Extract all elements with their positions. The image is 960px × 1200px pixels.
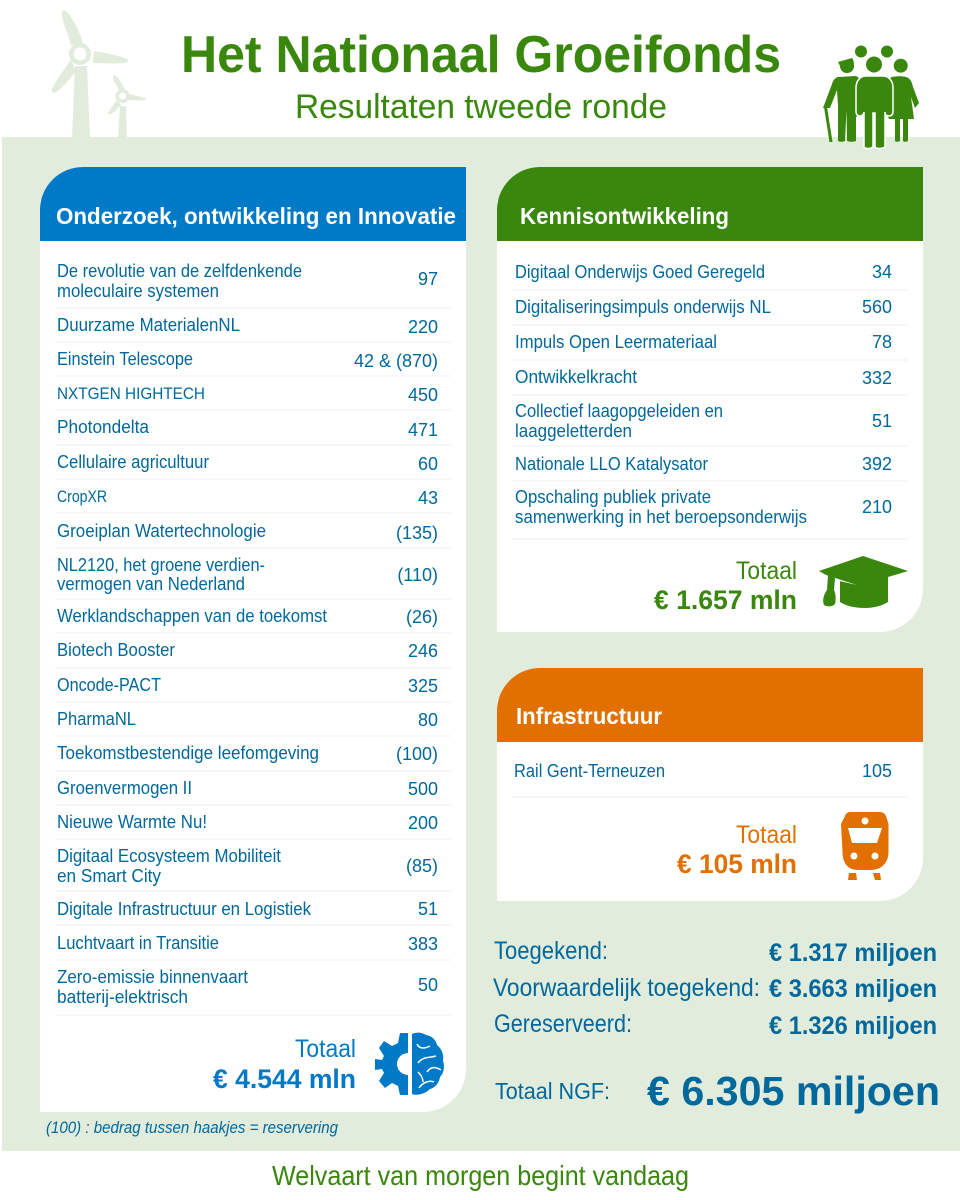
project rows: 43 — [418, 488, 438, 508]
project rows: Toekomstbestendige leefomgeving — [57, 743, 319, 763]
panel heading: Kennisontwikkeling — [520, 203, 729, 229]
panel header — [40, 167, 466, 241]
panel: Infrastructuur — [497, 668, 923, 901]
icon: group of people — [823, 46, 919, 148]
project rows: 392 — [862, 454, 892, 474]
panel: Onderzoek, ontwikkeling en Innovatie — [40, 167, 466, 1112]
summary: toegekend: € 1.317 miljoen — [769, 939, 937, 967]
project rows: vermogen van Nederland — [57, 574, 245, 594]
panel total: € 4.544 mln — [213, 1064, 356, 1094]
project rows: Collectief laagopgeleiden en — [515, 401, 723, 421]
project rows: Digitaliseringsimpuls onderwijs NL — [515, 297, 771, 317]
project rows: CropXR — [57, 488, 107, 506]
project rows: 97 — [418, 269, 438, 289]
project rows: batterij-elektrisch — [57, 987, 188, 1007]
project row — [514, 761, 892, 781]
project rows: Opschaling publiek private — [515, 487, 711, 507]
summary: totaal NGF: Totaal NGF: — [495, 1078, 610, 1104]
project rows: Groeiplan Watertechnologie — [57, 521, 266, 541]
project rows: 325 — [408, 676, 438, 696]
project rows: Einstein Telescope — [57, 349, 193, 369]
project rows: Biotech Booster — [57, 640, 175, 660]
project rows: 383 — [408, 934, 438, 954]
project rows: 471 — [408, 420, 438, 440]
title: Het Nationaal Groeifonds — [181, 26, 781, 84]
project rows: (135) — [396, 523, 438, 543]
summary: toegekend: Toegekend: — [494, 937, 608, 965]
project rows: Werklandschappen van de toekomst — [57, 606, 327, 626]
project rows: samenwerking in het beroepsonderwijs — [515, 507, 807, 527]
project rows: Ontwikkelkracht — [515, 367, 637, 387]
panel body — [497, 700, 923, 901]
project rows: 246 — [408, 641, 438, 661]
project rows: Oncode-PACT — [57, 675, 161, 695]
project rows: 50 — [418, 975, 438, 995]
summary: totaal NGF — [495, 1068, 940, 1114]
summary: totaal NGF: € 6.305 miljoen — [647, 1068, 940, 1114]
panel header — [497, 668, 923, 742]
summary: toegekend — [494, 937, 937, 967]
icon: wind turbines — [52, 11, 146, 138]
project rows: 60 — [418, 454, 438, 474]
panel heading: Onderzoek, ontwikkeling en Innovatie — [56, 203, 456, 229]
project rows: 220 — [408, 317, 438, 337]
project rows: Digitaal Onderwijs Goed Geregeld — [515, 262, 765, 282]
project rows: (26) — [406, 607, 438, 627]
project rows: Luchtvaart in Transitie — [57, 933, 219, 953]
project rows: 332 — [862, 368, 892, 388]
panel body — [40, 200, 466, 1112]
summary: gereserveerd — [494, 1010, 937, 1040]
panel body — [497, 200, 923, 632]
project rows: laaggeletterden — [515, 421, 632, 441]
panel total: Totaal — [736, 821, 797, 849]
project rows: 450 — [408, 385, 438, 405]
panel total: € 1.657 mln — [654, 585, 797, 615]
project rows: 51 — [418, 899, 438, 919]
project rows: Digitale Infrastructuur en Logistiek — [57, 899, 312, 919]
project rows — [57, 261, 438, 1007]
project rows: Nationale LLO Katalysator — [515, 454, 708, 474]
project rows: en Smart City — [57, 866, 161, 886]
panel total: € 105 mln — [677, 849, 797, 879]
panel heading: Infrastructuur — [516, 703, 662, 729]
icon: graduation cap — [819, 556, 908, 608]
project row: 105 — [862, 761, 892, 781]
project rows: Digitaal Ecosysteem Mobiliteit — [57, 846, 281, 866]
panel header — [497, 167, 923, 241]
project rows: (110) — [397, 565, 438, 585]
panel total — [677, 821, 797, 879]
project rows: 78 — [872, 332, 892, 352]
footnote: (100) : bedrag tussen haakjes = reservering — [46, 1118, 338, 1137]
project rows: 34 — [872, 262, 892, 282]
project row: Rail Gent-Terneuzen — [514, 761, 665, 781]
tagline: Welvaart van morgen begint vandaag — [272, 1160, 689, 1191]
project rows: De revolutie van de zelfdenkende — [57, 261, 302, 281]
project rows: 560 — [862, 297, 892, 317]
panel total: Totaal — [736, 557, 797, 585]
project rows: Duurzame MaterialenNL — [57, 315, 240, 335]
subtitle: Resultaten tweede ronde — [295, 88, 667, 126]
project rows: NL2120, het groene verdien- — [57, 555, 265, 575]
project rows: NXTGEN HIGHTECH — [57, 385, 205, 403]
panel total — [213, 1035, 356, 1094]
project rows: (85) — [406, 856, 438, 876]
project rows: PharmaNL — [57, 709, 136, 729]
project rows: Cellulaire agricultuur — [57, 452, 209, 472]
project rows: Zero-emissie binnenvaart — [57, 967, 248, 987]
project rows: 80 — [418, 710, 438, 730]
icon: gear and brain — [375, 1033, 444, 1095]
project rows: 500 — [408, 779, 438, 799]
project rows: 51 — [872, 411, 892, 431]
panel total: Totaal — [295, 1035, 356, 1063]
project rows: Groenvermogen II — [57, 778, 192, 798]
project rows: 210 — [862, 497, 892, 517]
project rows: Nieuwe Warmte Nu! — [57, 812, 207, 832]
summary: gereserveerd: Gereserveerd: — [494, 1010, 632, 1038]
project rows: Photondelta — [57, 417, 150, 437]
panel: Kennisontwikkeling — [497, 167, 923, 632]
summary: voorwaardelijk toegekend: Voorwaardelijk toegekend: — [493, 974, 760, 1002]
panel total — [654, 557, 797, 615]
project rows: Impuls Open Leermateriaal — [515, 332, 717, 352]
project rows — [515, 262, 892, 527]
summary: gereserveerd: € 1.326 miljoen — [769, 1012, 937, 1040]
summary: voorwaardelijk toegekend: € 3.663 miljoen — [769, 975, 937, 1003]
project rows: 42 & (870) — [354, 351, 438, 371]
project rows: moleculaire systemen — [57, 281, 219, 301]
icon: train — [841, 812, 888, 880]
project rows: 200 — [408, 813, 438, 833]
project rows: (100) — [396, 744, 438, 764]
summary: voorwaardelijk toegekend — [493, 974, 937, 1003]
